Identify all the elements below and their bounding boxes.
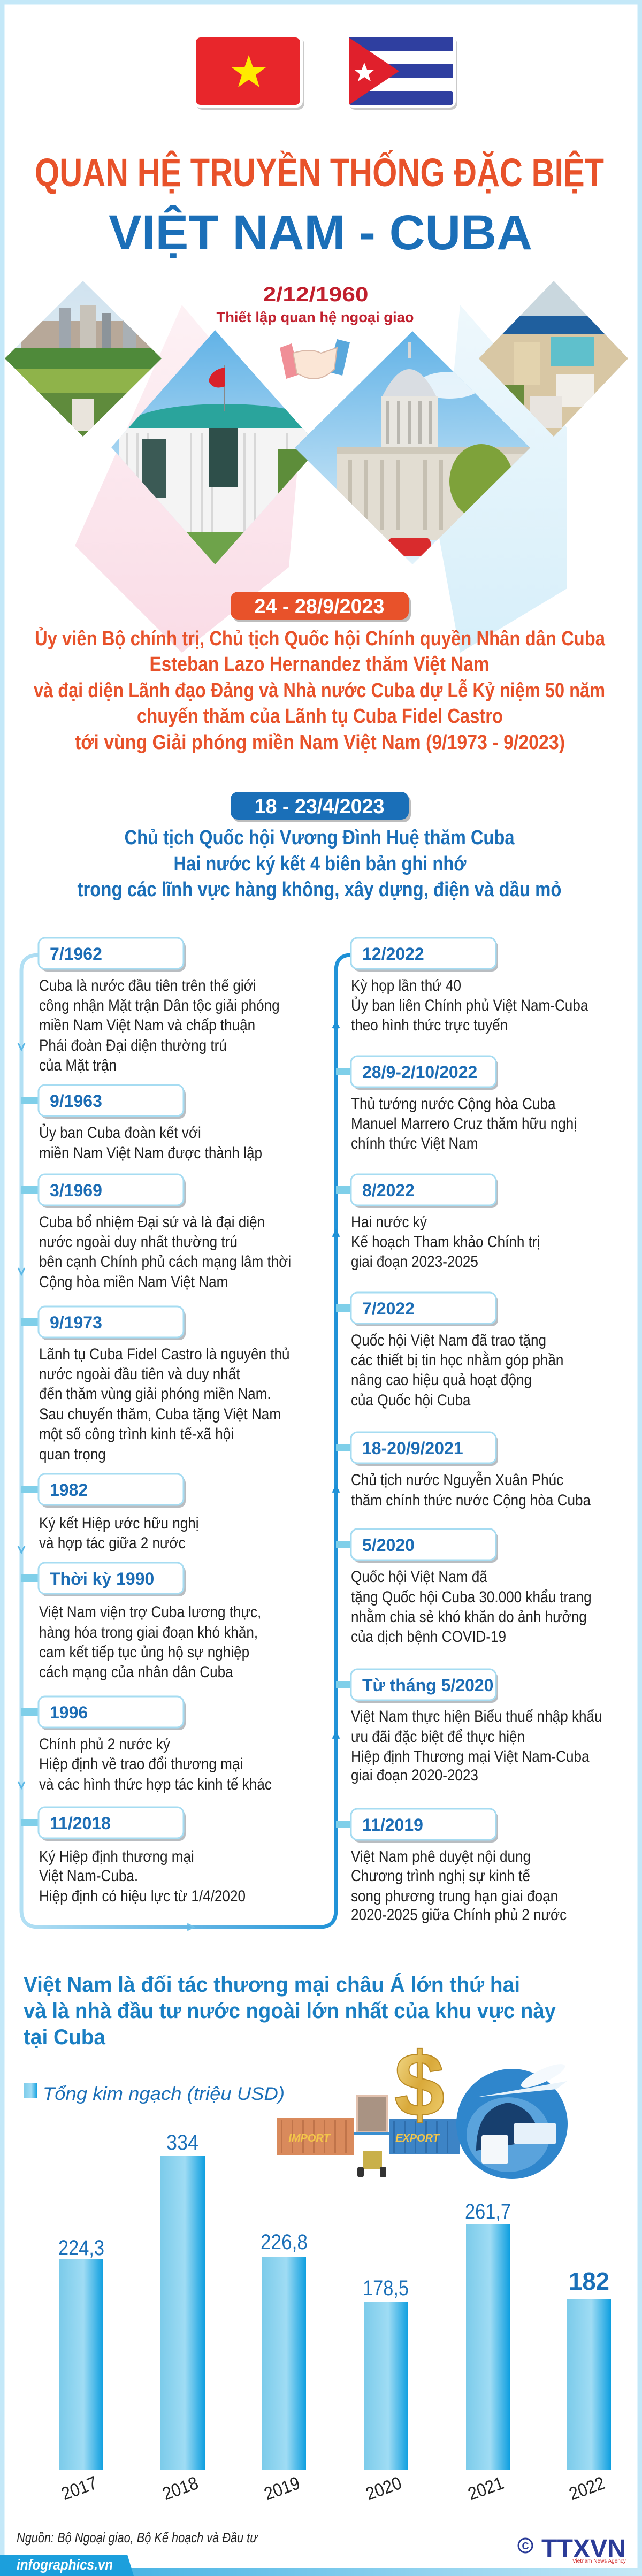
event: 28/9-2/10/2022: Thủ tướng nước Cộng hòa Cuba xyxy=(351,1095,556,1112)
photo: National Assembly xyxy=(111,330,308,564)
event: 11/2018: 11/2018 xyxy=(50,1814,111,1833)
event: 1996: Chính phủ 2 nước ký xyxy=(39,1735,170,1753)
event: 18-20/9/2021: Chủ tịch nước Nguyễn Xuân Phúc xyxy=(351,1471,563,1488)
logo: TTXVN: TTXVN xyxy=(541,2535,626,2563)
event: 5/2020: Quốc hội Việt Nam đã xyxy=(351,1568,487,1585)
event: 7/1962: của Mặt trận xyxy=(39,1056,117,1074)
event: 1982: 1982 xyxy=(50,1480,88,1500)
bar 2020 xyxy=(363,2276,409,2504)
event: 3/1969: Cộng hòa miền Nam Việt Nam xyxy=(39,1273,228,1290)
event: 7/1962: Phái đoàn Đại diện thường trú xyxy=(39,1036,227,1054)
illustration: trade logistics xyxy=(277,2034,568,2179)
chart heading: Việt Nam là đối tác thương mại châu Á lớn thứ hai xyxy=(24,1973,520,1997)
photo: Havana Capitol xyxy=(292,326,532,567)
bar 2019 xyxy=(261,2230,308,2504)
event: 12/2022: 12/2022 xyxy=(362,944,424,964)
chart heading xyxy=(24,1973,556,2049)
event: 9/1973: Sau chuyến thăm, Cuba tặng Việt Nam xyxy=(39,1405,281,1423)
bar 2018: 334 xyxy=(166,2131,198,2154)
event: 7/1962 xyxy=(39,938,280,1074)
bar 2020: 2020 xyxy=(363,2473,404,2504)
text: visit description: tới vùng Giải phóng miền Nam Việt Nam (9/1973 - 9/2023) xyxy=(75,731,565,754)
event: Từ tháng 5/2020: Hiệp định Thương mại Việt Nam-Cuba xyxy=(351,1747,590,1765)
footer xyxy=(0,2555,642,2576)
text: visit description xyxy=(77,827,562,901)
chart heading: tại Cuba xyxy=(24,2025,106,2049)
footer: infographics.vn xyxy=(17,2556,113,2573)
event: Từ tháng 5/2020 xyxy=(336,1669,602,1784)
illustration: trade logistics: IMPORT xyxy=(288,2132,331,2144)
flag: Cuba xyxy=(346,35,457,110)
event: 1982: và hợp tác giữa 2 nước xyxy=(39,1534,186,1551)
event: 5/2020: tặng Quốc hội Cuba 30.000 khẩu trang xyxy=(351,1588,592,1606)
event: 9/1973 xyxy=(21,1306,290,1463)
logo: TTXVN: Vietnam News Agency xyxy=(572,2558,626,2564)
chart heading: và là nhà đầu tư nước ngoài lớn nhất của khu vực này xyxy=(24,1999,556,2023)
event: Thời kỳ 1990 xyxy=(21,1563,261,1680)
event: 9/1963: miền Nam Việt Nam được thành lập xyxy=(39,1144,262,1161)
panel: 24-28/9/2023 visit xyxy=(34,592,606,754)
flag: Vietnam xyxy=(193,35,304,110)
photo: Hanoi lake xyxy=(0,278,166,441)
event: 28/9-2/10/2022: 28/9-2/10/2022 xyxy=(362,1062,477,1082)
event: 18-20/9/2021 xyxy=(336,1432,591,1509)
event: 9/1973: Lãnh tụ Cuba Fidel Castro là nguyên thủ xyxy=(39,1345,290,1363)
event: 12/2022: theo hình thức trực tuyến xyxy=(351,1016,508,1034)
text: visit description: trong các lĩnh vực hàng không, xây dựng, điện và dầu mỏ xyxy=(77,878,562,901)
event: 9/1963: 9/1963 xyxy=(50,1091,102,1111)
text: visit description xyxy=(34,626,606,754)
event: 12/2022: Ủy ban liên Chính phủ Việt Nam-Cuba xyxy=(351,996,588,1014)
bar 2021 xyxy=(465,2200,511,2504)
export container xyxy=(389,2119,460,2154)
event: 8/2022: Hai nước ký xyxy=(351,1213,427,1230)
bar 2019: 226,8 xyxy=(261,2230,308,2254)
event: 18-20/9/2021: 18-20/9/2021 xyxy=(362,1439,463,1458)
date pill blue xyxy=(231,792,411,822)
event: 3/1969: 3/1969 xyxy=(50,1181,102,1200)
bar 2021: 2021 xyxy=(465,2473,507,2504)
bar 2018 xyxy=(160,2131,205,2504)
event: 7/2022: của Quốc hội Cuba xyxy=(351,1391,471,1409)
event: 11/2019 xyxy=(336,1809,567,1923)
founding date xyxy=(216,284,414,325)
event: 1996: 1996 xyxy=(50,1703,88,1722)
event: Từ tháng 5/2020: giai đoạn 2020-2023 xyxy=(351,1766,478,1784)
dollar sign: $ xyxy=(394,2034,445,2136)
event: 1996 xyxy=(21,1696,272,1793)
event: 1982 xyxy=(21,1474,199,1551)
event: 9/1973: nước ngoài đầu tiên và duy nhất xyxy=(39,1365,240,1382)
bar 2022: 182 xyxy=(569,2267,609,2295)
bar chart xyxy=(58,2131,611,2504)
event: 8/2022: 8/2022 xyxy=(362,1181,415,1200)
founding date: Thiết lập quan hệ ngoại giao xyxy=(216,309,414,325)
event: 5/2020: nhằm chia sẻ khó khăn do ảnh hưởng xyxy=(351,1608,587,1625)
bar 2018: 2018 xyxy=(160,2473,201,2504)
event: 9/1973: 9/1973 xyxy=(50,1313,102,1332)
bar 2020: 178,5 xyxy=(363,2276,409,2300)
event: 7/1962: 7/1962 xyxy=(50,944,102,964)
event: 28/9-2/10/2022: chính thức Việt Nam xyxy=(351,1134,478,1152)
event: Thời kỳ 1990: cam kết tiếp tục ủng hộ sự nghiệp xyxy=(39,1643,249,1661)
text: visit description: Esteban Lazo Hernandez thăm Việt Nam xyxy=(150,653,489,676)
event: Thời kỳ 1990: hàng hóa trong giai đoạn khó khăn, xyxy=(39,1623,258,1641)
flags xyxy=(193,35,457,110)
event: 11/2018: Hiệp định có hiệu lực từ 1/4/2020 xyxy=(39,1887,246,1905)
transport circle xyxy=(456,2069,568,2179)
event: 3/1969 xyxy=(21,1174,291,1290)
timeline line xyxy=(21,955,351,1927)
photo collage xyxy=(0,278,631,653)
event: 7/2022: 7/2022 xyxy=(362,1299,415,1318)
event: 8/2022: giai đoạn 2023-2025 xyxy=(351,1252,478,1270)
event: 5/2020: 5/2020 xyxy=(362,1535,415,1555)
event: 7/2022: các thiết bị tin học nhằm góp phần xyxy=(351,1351,563,1369)
event: 3/1969: nước ngoài duy nhất thường trú xyxy=(39,1233,238,1250)
title xyxy=(35,150,604,260)
text: visit description: Hai nước ký kết 4 biên bản ghi nhớ xyxy=(173,853,467,875)
title: VIỆT NAM - CUBA xyxy=(109,205,532,260)
import container xyxy=(277,2118,354,2155)
event: 28/9-2/10/2022 xyxy=(336,1056,577,1152)
bar 2017 xyxy=(58,2236,104,2504)
event: 8/2022: Kế hoạch Tham khảo Chính trị xyxy=(351,1233,540,1250)
founding date: 2/12/1960 xyxy=(263,284,368,306)
event: 11/2019: 11/2019 xyxy=(362,1815,423,1834)
icon: handshake xyxy=(280,339,350,379)
event: 9/1963: Ủy ban Cuba đoàn kết với xyxy=(39,1123,201,1141)
event: 12/2022 xyxy=(351,938,588,1034)
date pill orange: 24 - 28/9/2023 xyxy=(255,595,384,618)
event: Từ tháng 5/2020: Việt Nam thực hiện Biểu thuế nhập khẩu xyxy=(351,1707,602,1725)
illustration: trade logistics: EXPORT xyxy=(395,2132,440,2144)
event: 11/2019: Chương trình nghị sự kinh tế xyxy=(351,1867,530,1884)
date pill orange xyxy=(231,592,411,622)
event: 11/2019: song phương trung hạn giai đoạn xyxy=(351,1887,558,1905)
event: 11/2018 xyxy=(21,1807,246,1905)
date pill blue: 18 - 23/4/2023 xyxy=(255,796,384,818)
panel: 18-23/4/2023 visit xyxy=(77,792,562,901)
event: 12/2022: Kỳ họp lần thứ 40 xyxy=(351,976,461,994)
event: 7/2022: Quốc hội Việt Nam đã trao tặng xyxy=(351,1331,546,1349)
event: 11/2019: Việt Nam phê duyệt nội dung xyxy=(351,1847,531,1865)
source note: Nguồn: Bộ Ngoại giao, Bộ Kế hoạch và Đầu tư xyxy=(17,2529,258,2546)
event: 9/1973: quan trọng xyxy=(39,1445,106,1463)
logo: TTXVN: C xyxy=(522,2541,529,2551)
event: 8/2022 xyxy=(336,1174,540,1270)
arrows xyxy=(18,1022,339,1930)
event: Thời kỳ 1990: Việt Nam viện trợ Cuba lương thực, xyxy=(39,1603,261,1620)
legend: Tổng kim ngạch (triệu USD) xyxy=(43,2084,285,2104)
event: 9/1963 xyxy=(21,1085,262,1161)
event: 18-20/9/2021: thăm chính thức nước Cộng hòa Cuba xyxy=(351,1491,591,1509)
event: 5/2020: của dịch bệnh COVID-19 xyxy=(351,1627,506,1645)
text: visit description: chuyến thăm của Lãnh tụ Cuba Fidel Castro xyxy=(137,705,503,728)
event: 28/9-2/10/2022: Manuel Marrero Cruz thăm hữu nghị xyxy=(351,1114,577,1132)
text: visit description: Chủ tịch Quốc hội Vương Đình Huệ thăm Cuba xyxy=(124,827,515,849)
event: 3/1969: Cuba bổ nhiệm Đại sứ và là đại diện xyxy=(39,1213,265,1230)
event: 11/2019: 2020-2025 giữa Chính phủ 2 nước xyxy=(351,1906,567,1923)
event: 1996: và các hình thức hợp tác kinh tế khác xyxy=(39,1775,272,1793)
event: 1982: Ký kết Hiệp ước hữu nghị xyxy=(39,1514,199,1532)
event: 7/2022: nâng cao hiệu quả hoạt động xyxy=(351,1371,532,1388)
bar 2022 xyxy=(567,2267,611,2504)
event: Thời kỳ 1990: cách mạng của nhân dân Cuba xyxy=(39,1663,233,1680)
event: 1996: Hiệp định về trao đổi thương mại xyxy=(39,1755,243,1772)
timeline xyxy=(18,938,602,1930)
bar 2021: 261,7 xyxy=(465,2200,511,2223)
bar 2017: 224,3 xyxy=(58,2236,104,2260)
bar 2019: 2019 xyxy=(262,2473,303,2504)
event: 9/1973: đến thăm vùng giải phóng miền Nam. xyxy=(39,1385,271,1402)
event: 11/2018: Ký Hiệp định thương mại xyxy=(39,1847,194,1865)
event: 7/1962: miền Nam Việt Nam và chấp thuận xyxy=(39,1016,255,1034)
event: 7/1962: công nhận Mặt trận Dân tộc giải phóng xyxy=(39,996,280,1014)
event: Từ tháng 5/2020: Từ tháng 5/2020 xyxy=(362,1676,493,1695)
event: Thời kỳ 1990: Thời kỳ 1990 xyxy=(50,1569,154,1588)
event: 3/1969: bên cạnh Chính phủ cách mạng lâm thời xyxy=(39,1252,291,1270)
forklift xyxy=(357,2096,387,2132)
event: Từ tháng 5/2020: ưu đãi đặc biệt để thực hiện xyxy=(351,1727,525,1745)
event: 11/2018: Việt Nam-Cuba. xyxy=(39,1867,138,1884)
event: 9/1973: một số công trình kinh tế-xã hội xyxy=(39,1425,234,1442)
event: 7/2022 xyxy=(336,1293,563,1409)
event: 5/2020 xyxy=(336,1529,592,1645)
bar 2022: 2022 xyxy=(567,2473,608,2504)
bar 2017: 2017 xyxy=(59,2473,100,2504)
event: 7/1962: Cuba là nước đầu tiên trên thế giới xyxy=(39,976,256,994)
photo: Havana city xyxy=(476,278,631,441)
